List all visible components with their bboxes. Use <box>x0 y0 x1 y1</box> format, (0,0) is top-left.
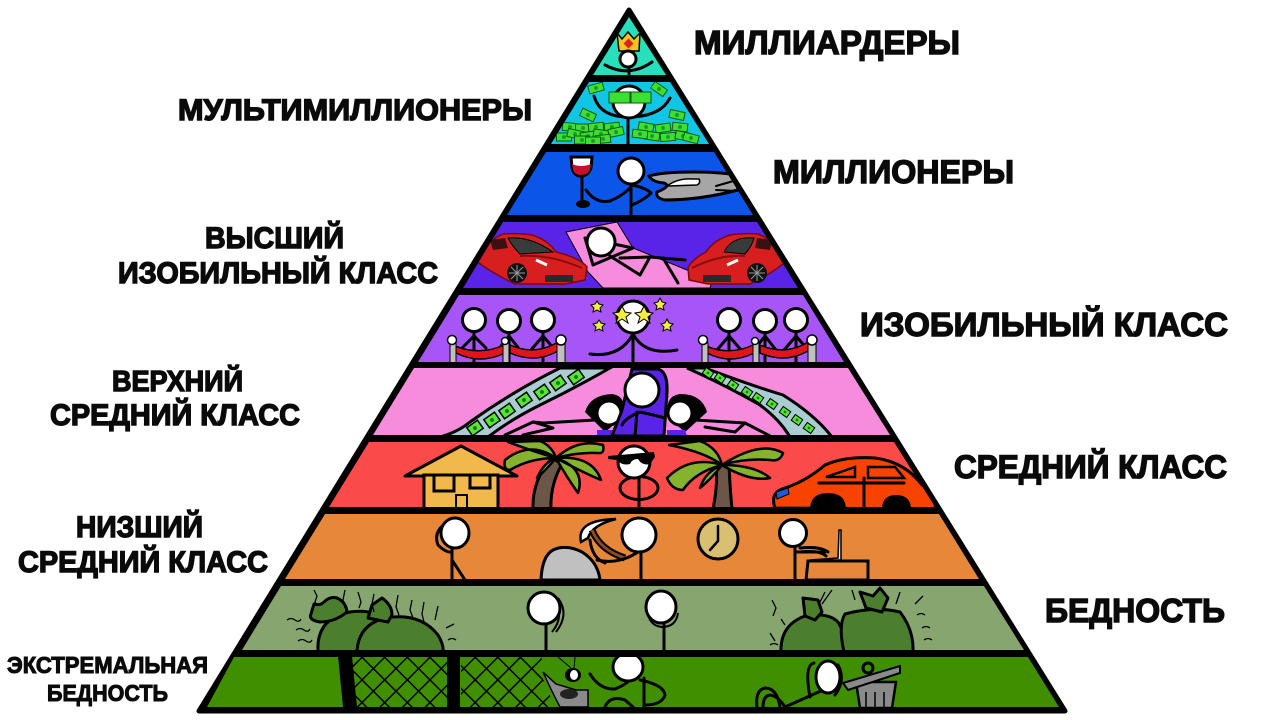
icon: clock <box>698 519 738 559</box>
figure: poor person two <box>646 591 678 652</box>
money on eyes <box>609 92 651 103</box>
label: extreme poverty <box>7 652 208 706</box>
icon: orange car <box>774 458 936 509</box>
label: upper affluent class: ВЫСШИЙ <box>205 221 344 255</box>
label: lower middle class: СРЕДНИЙ КЛАСС <box>18 545 268 579</box>
icon: red car right <box>688 234 787 284</box>
fence <box>338 656 555 707</box>
label: middle class: СРЕДНИЙ КЛАСС <box>954 449 1227 485</box>
crowd left <box>462 308 555 362</box>
conveyor belt right <box>687 368 832 437</box>
red velvet ropes right <box>698 335 817 363</box>
figure: tired worker <box>437 518 469 580</box>
figure: office worker <box>780 520 825 580</box>
tier: poverty <box>235 584 1035 654</box>
icon: palm right <box>667 441 783 509</box>
icon: red car left <box>475 234 587 284</box>
label: upper affluent class: ИЗОБИЛЬНЫЙ КЛАСС <box>118 256 438 290</box>
conveyor belt left <box>440 368 610 437</box>
label: billionaires: МИЛЛИАРДЕРЫ <box>694 24 960 61</box>
figure: left rider <box>505 394 624 436</box>
label: upper middle class: СРЕДНИЙ КЛАСС <box>50 398 300 432</box>
label: upper middle class <box>50 364 300 432</box>
label: lower middle class: НИЗШИЙ <box>76 510 203 544</box>
icon: rat <box>543 657 588 707</box>
money piles <box>556 81 699 145</box>
crowd right <box>717 308 808 362</box>
stink lines right <box>770 590 932 645</box>
tier: billionaires <box>593 17 666 75</box>
pyramid outline <box>199 10 1065 711</box>
label: poverty: БЕДНОСТЬ <box>1045 592 1225 629</box>
figure: person in sunglasses <box>608 446 658 508</box>
stars <box>591 298 673 331</box>
icon: palm left <box>505 441 603 509</box>
tier: upper affluent class <box>455 220 805 290</box>
figure: millionaire <box>586 158 651 215</box>
tier: extreme poverty <box>200 653 1070 709</box>
tier: affluent class <box>410 293 850 363</box>
tier: millionaires <box>507 152 753 215</box>
icon: laptop and desk <box>800 530 868 580</box>
tier: middle class <box>320 439 945 509</box>
tier: upper middle class <box>373 368 890 435</box>
figure: miner <box>590 518 656 580</box>
rock <box>541 547 600 580</box>
figure: person crouching by rat <box>590 653 665 707</box>
tier: multimillionaires <box>551 82 709 144</box>
icon: house <box>405 446 517 509</box>
label: millionaires: МИЛЛИОНЕРЫ <box>773 154 1014 190</box>
label: upper affluent class <box>118 221 438 290</box>
figure: multimillionaire <box>594 86 670 146</box>
icon: yacht <box>649 172 738 200</box>
icon: wine glass <box>571 157 592 208</box>
label: lower middle class <box>18 510 268 579</box>
figure: sunbather <box>585 228 685 283</box>
figure: poor person one <box>528 592 564 652</box>
label: extreme poverty: ЭКСТРЕМАЛЬНАЯ <box>7 652 208 678</box>
tier: lower middle class <box>280 512 990 580</box>
red velvet ropes left <box>448 335 566 363</box>
icon: crown <box>617 32 640 51</box>
figure: right rider <box>667 394 770 436</box>
label: upper middle class: ВЕРХНИЙ <box>112 364 243 398</box>
figure: central person <box>612 369 667 436</box>
stink lines left <box>287 590 456 642</box>
towel <box>566 222 713 288</box>
label: extreme poverty: БЕДНОСТЬ <box>47 680 168 706</box>
icon: garbage bags left <box>310 598 443 652</box>
icon: pickaxe <box>580 519 625 558</box>
label: affluent class: ИЗОБИЛЬНЫЙ КЛАСС <box>860 305 1228 343</box>
figure: billionaire <box>605 51 652 76</box>
icon: garbage bags right <box>781 588 913 652</box>
figure: celebrity <box>590 301 677 362</box>
icon: trash can <box>843 663 900 708</box>
figure: person at trash can <box>757 661 841 707</box>
label: multimillionaires: МУЛЬТИМИЛЛИОНЕРЫ <box>178 94 532 127</box>
